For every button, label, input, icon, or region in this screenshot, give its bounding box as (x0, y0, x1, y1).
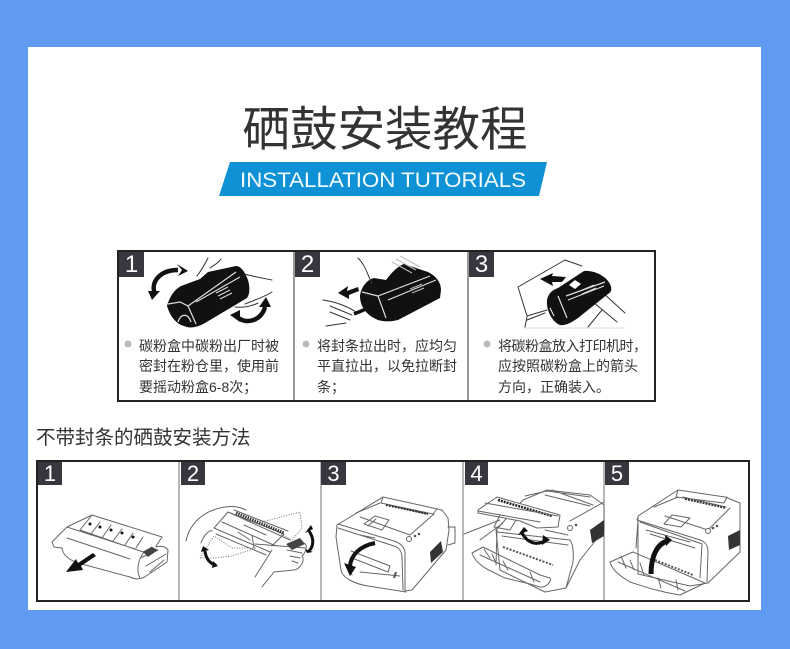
step 4: insert cartridge into open printer: 4 (470, 461, 483, 486)
step 2: pull seal (295, 251, 457, 396)
step 4: insert cartridge into open printer (464, 461, 604, 592)
bullet text 2 (302, 338, 457, 396)
bullet text 2: 条； (317, 379, 345, 396)
step 2: rotate drum: 2 (187, 461, 199, 486)
bullet text 1: 密封在粉仓里，使用前 (139, 358, 279, 374)
step 1: remove seal (38, 461, 168, 579)
bullet text 2: 平直拉出，以免拉断封 (317, 358, 457, 374)
title: 硒鼓安装教程 (242, 104, 528, 157)
step 2: pull seal: 2 (301, 251, 314, 278)
step 5: close printer cover: 5 (611, 461, 623, 486)
bullet text 3: 方向，正确装入。 (498, 379, 610, 395)
bullet text 1: 碳粉盒中碳粉出厂时被 (139, 338, 279, 354)
subtitle banner (219, 162, 547, 196)
section heading: 不带封条的硒鼓安装方法 (36, 427, 251, 449)
step 1: shake cartridge (119, 251, 279, 396)
step 5: close printer cover (605, 461, 740, 595)
step 2: rotate drum (181, 461, 313, 587)
bullet text 3: 应按照碳粉盒上的箭头 (498, 358, 638, 374)
bullet text 3: 将碳粉盒放入打印机时， (498, 338, 647, 354)
bullet text 2: 将封条拉出时，应均匀 (317, 338, 457, 354)
bullet text 3 (484, 338, 647, 395)
panel: sealed cartridge steps (118, 251, 655, 401)
panel: cartridge without seal steps (37, 461, 749, 601)
step 3: insert cartridge: 3 (475, 251, 488, 278)
bullet text 1 (124, 338, 279, 396)
step 1: remove seal: 1 (44, 461, 56, 486)
step 3: open printer cover: 3 (327, 461, 340, 486)
step 1: shake cartridge: 1 (125, 251, 138, 278)
step 3: insert cartridge (469, 251, 647, 395)
subtitle banner: INSTALLATION TUTORIALS (240, 169, 526, 192)
step 3: open printer cover (321, 461, 455, 592)
bullet text 1: 要摇动粉盒6-8次； (139, 379, 257, 396)
